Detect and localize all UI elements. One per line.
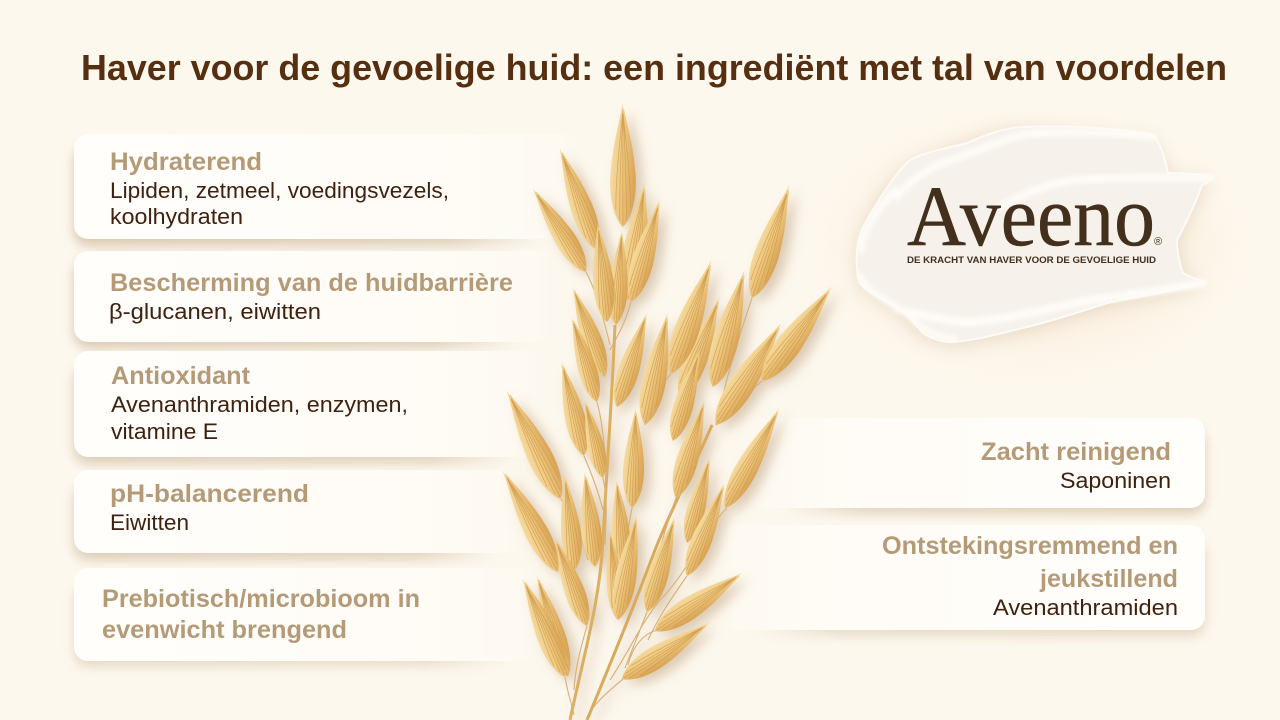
- text: antioxidant ingredients: [111, 392, 408, 444]
- heading: ph-balancerend: pH-balancerend: [110, 480, 309, 508]
- panel: bescherming: [74, 251, 556, 348]
- panel: antioxidant: [74, 351, 544, 464]
- cream highlights: [860, 132, 1210, 339]
- title: Haver voor de gevoelige huid: een ingrediënt met tal van voordelen: [81, 47, 1227, 88]
- heading: prebiotisch: [102, 585, 420, 644]
- text: bescherming ingredients: β-glucanen, eiwitten: [109, 299, 321, 324]
- cream smear: [857, 126, 1213, 342]
- peach glow behind cream: [845, 140, 1215, 350]
- heading: ontstekingsremmend: jeukstillend: [1039, 565, 1178, 593]
- text: hydraterend ingredients: koolhydraten: [110, 204, 243, 229]
- heading: ontstekingsremmend: Ontstekingsremmend en: [882, 532, 1178, 560]
- text: antioxidant ingredients: Avenanthramiden, enzymen,: [111, 392, 408, 417]
- cream swatch with logo: [857, 126, 1213, 346]
- heading: antioxidant: Antioxidant: [111, 362, 251, 390]
- panel: ontstekingsremmend: [715, 525, 1205, 636]
- panel: zacht reinigend: [745, 418, 1205, 514]
- illustration: oat stalk: [493, 103, 842, 720]
- text: avenanthramiden: Avenanthramiden: [993, 595, 1178, 620]
- panel: prebiotisch: [74, 568, 539, 666]
- logo tagline: DE KRACHT VAN HAVER VOOR DE GEVOELIGE HUID: [907, 255, 1156, 266]
- text: hydraterend ingredients: Lipiden, zetmeel, voedingsvezels,: [110, 178, 449, 203]
- text: hydraterend ingredients: [110, 178, 449, 229]
- heading: ontstekingsremmend: [882, 532, 1178, 593]
- heading: prebiotisch: evenwicht brengend: [102, 616, 347, 644]
- logo wordmark: Aveeno: [907, 168, 1155, 264]
- heading: bescherming: Bescherming van de huidbarrière: [110, 269, 513, 297]
- text: saponinen: Saponinen: [1060, 468, 1171, 493]
- cream shadow: [857, 131, 1213, 346]
- heading: zacht reinigend: Zacht reinigend: [981, 438, 1171, 466]
- heading: prebiotisch: Prebiotisch/microbioom in: [102, 585, 420, 613]
- logo registered mark: ®: [1154, 236, 1162, 248]
- panel: hydraterend: [74, 134, 584, 246]
- heading: hydraterend: Hydraterend: [110, 148, 262, 176]
- text: antioxidant ingredients: vitamine E: [111, 419, 218, 444]
- panel: ph-balancerend: [74, 470, 524, 560]
- text: ph ingredients: Eiwitten: [110, 510, 189, 535]
